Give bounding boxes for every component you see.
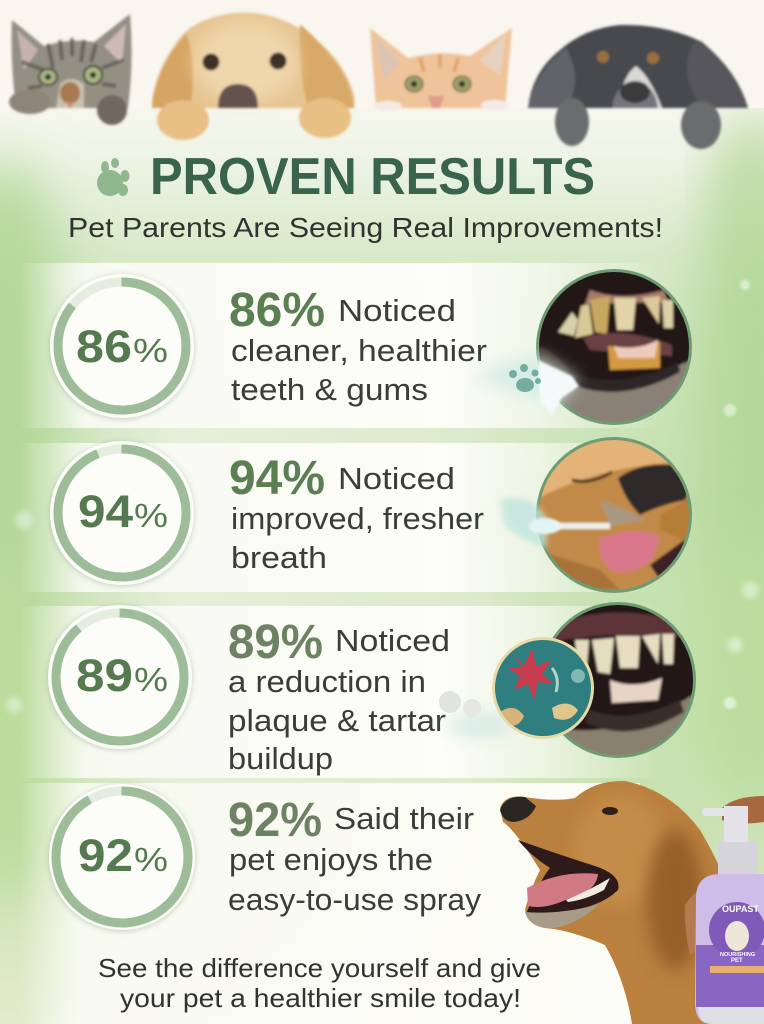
icon: tabby cat peeking <box>9 14 132 125</box>
product: oral care spray bottle: PET <box>731 958 743 964</box>
icon: golden retriever peeking <box>152 13 355 140</box>
stat: 86%: cleaner, healthier <box>231 333 487 368</box>
stat: 94% <box>229 452 484 575</box>
icon: paw <box>97 158 130 196</box>
stat: 92% <box>228 794 482 917</box>
gauge: 94%: % <box>134 497 168 534</box>
icon: bacteria magnified circle <box>490 636 596 740</box>
icon: orange cat peeking <box>370 28 512 111</box>
closing message <box>98 953 541 1013</box>
stat: 86% <box>229 284 487 407</box>
photo: golden dog with open mouth <box>500 781 764 1024</box>
photo: clean teeth <box>552 602 696 758</box>
gauge: 89%: 89 <box>76 650 133 701</box>
closing message: See the difference yourself and give <box>98 953 541 983</box>
photo: dirty teeth <box>536 269 692 425</box>
title <box>97 148 595 206</box>
stat: 89%: Noticed <box>335 623 450 658</box>
stat: 86%: teeth & gums <box>231 372 428 407</box>
gauge: 92% <box>49 784 195 930</box>
result row panels <box>20 263 700 1024</box>
closing message: your pet a healthier smile today! <box>120 983 521 1013</box>
stat: 94%: improved, fresher <box>231 501 484 536</box>
stat: 94%: Noticed <box>338 461 455 496</box>
stat: 89%: plaque & tartar <box>228 703 446 738</box>
gauge: 92%: % <box>134 841 168 878</box>
stat: 92%: 92% <box>228 794 322 847</box>
product: oral care spray bottle: OUPAST <box>722 904 759 914</box>
stat: 92%: Said their <box>334 801 474 836</box>
heading: proven results: PROVEN RESULTS <box>150 148 595 206</box>
stat: 89% <box>228 616 450 776</box>
stat: 94%: 94% <box>229 452 325 505</box>
subtitle: Pet Parents Are Seeing Real Improvements! <box>68 212 663 243</box>
stat: 92%: easy-to-use spray <box>228 882 482 917</box>
photo: dog getting breath spray <box>500 435 700 600</box>
gauge: 94% <box>50 441 194 585</box>
faint paw and mist <box>439 691 512 739</box>
product: oral care spray bottle <box>685 796 764 1024</box>
gauge: 89% <box>48 605 192 749</box>
stat: 89%: 89% <box>228 616 323 669</box>
stat: 92%: pet enjoys the <box>229 842 433 877</box>
gauge: 94%: 94 <box>78 486 133 537</box>
gauge: 86% <box>50 274 194 418</box>
splash with paw <box>470 355 579 416</box>
stat: 86%: Noticed <box>338 293 456 328</box>
stat: 89%: buildup <box>228 741 333 776</box>
icon: black and white dog peeking <box>528 25 748 149</box>
gauge: 86%: 86 <box>76 321 132 372</box>
gauge: 86%: % <box>133 332 168 369</box>
stat: 94%: breath <box>231 540 327 575</box>
product: oral care spray bottle: NOURISHING <box>720 952 755 958</box>
gauge: 89%: % <box>134 661 168 698</box>
gauge: 92%: 92 <box>78 830 133 881</box>
stat: 89%: a reduction in <box>228 664 426 699</box>
stat: 86%: 86% <box>229 284 325 337</box>
